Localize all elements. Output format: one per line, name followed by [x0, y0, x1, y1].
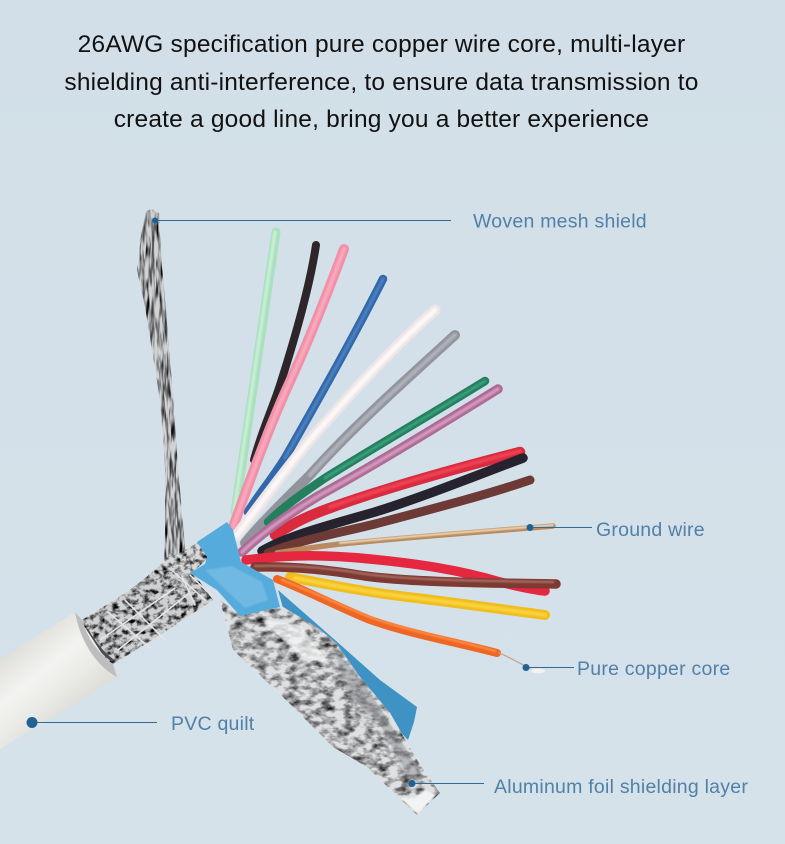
wire: white — [236, 310, 435, 536]
wire: dark green — [268, 381, 485, 522]
wire: red upper — [275, 451, 520, 535]
shield braid over inner foil — [82, 552, 213, 664]
wire: red lower — [246, 556, 545, 591]
foil sheet — [220, 600, 440, 815]
cable illustration — [0, 209, 556, 815]
wire: copper ground — [277, 525, 553, 553]
wire: grey — [245, 335, 455, 543]
callout: ground wire — [526, 519, 705, 541]
title: shielding anti-interference, to ensure data transmission to — [64, 69, 699, 96]
callout: woven mesh shield — [152, 210, 647, 232]
callout: woven mesh shield: Woven mesh shield — [473, 210, 647, 232]
foil highlights — [262, 620, 436, 814]
blue film highlight — [205, 566, 268, 608]
silver neck band — [160, 541, 208, 578]
wire: brown upper — [268, 480, 530, 553]
callout: PVC quilt: PVC quilt — [171, 713, 255, 735]
wire: brown lower — [255, 566, 556, 584]
title: 26AWG specification pure copper wire core, multi-layer — [78, 31, 685, 58]
bare copper core — [499, 653, 545, 674]
callout: ground wire: Ground wire — [596, 519, 705, 541]
wire: black — [254, 245, 316, 460]
blue film — [190, 522, 280, 616]
wire: light green — [234, 232, 276, 512]
braided shield strand — [137, 209, 186, 560]
callout: PVC quilt — [26, 713, 255, 735]
wire: blue — [248, 279, 383, 512]
wire: black lower — [262, 458, 523, 551]
wire: purple — [242, 389, 498, 552]
wire: orange — [277, 579, 497, 653]
title — [64, 31, 699, 133]
blue film behind foil — [278, 590, 417, 740]
wire: pink — [233, 249, 344, 527]
callout: aluminum foil shielding layer: Aluminum foil shielding layer — [494, 776, 748, 798]
title: create a good line, bring you a better experience — [114, 106, 649, 133]
wire: yellow — [290, 577, 545, 615]
PVC jacket — [0, 612, 117, 749]
callout: pure copper core: Pure copper core — [577, 658, 730, 680]
